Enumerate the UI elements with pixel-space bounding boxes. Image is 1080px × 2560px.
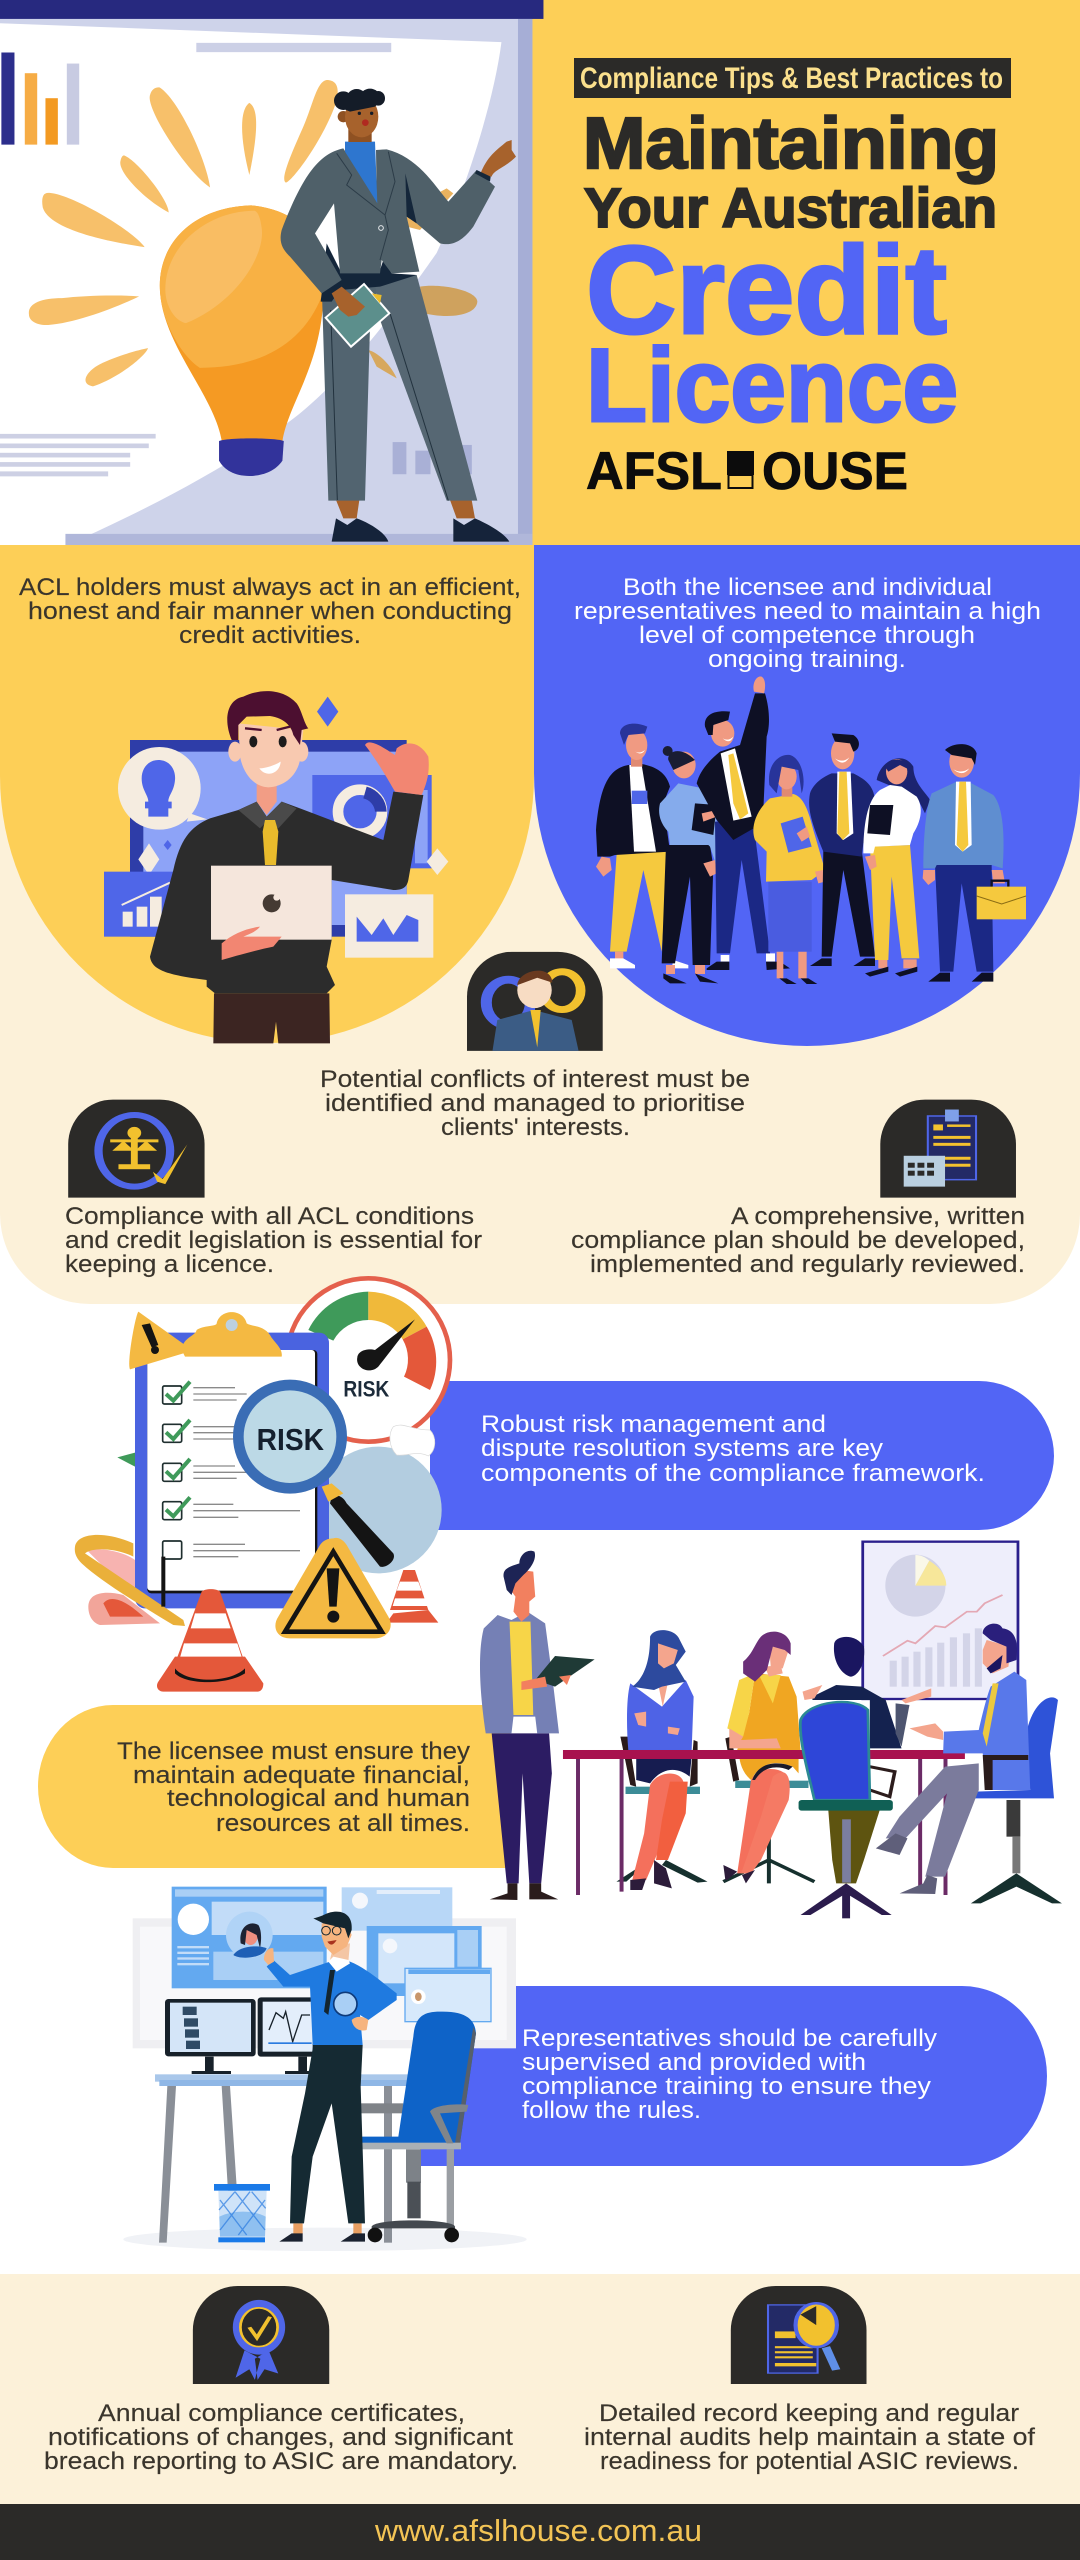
office chair <box>359 2012 476 2242</box>
seated woman in yellow <box>723 1632 814 1883</box>
panel text: efficient honest and fair: ACL holders must always act in an efficient, <box>19 574 521 601</box>
panel: risk management callout: dispute resolution systems are key <box>481 1435 884 1462</box>
text: compliance plan: A comprehensive, written <box>731 1203 1025 1230</box>
panel: resources callout: technological and human <box>167 1785 470 1812</box>
bar chart panel <box>104 872 181 937</box>
logo: AFSL House: AFSL <box>586 442 722 501</box>
icon: compliance clipboard and calendar <box>880 1100 1016 1198</box>
illustration: risk checklist, gauge and cones <box>75 1278 450 1692</box>
text: conflicts of interest: identified and managed to prioritise <box>325 1090 745 1117</box>
figure 7 <box>923 744 1005 982</box>
panel: risk management callout <box>430 1381 1054 1530</box>
area chart panel <box>345 894 433 958</box>
seated woman in blue <box>616 1630 708 1890</box>
text: ACL conditions: Compliance with all ACL conditions <box>65 1203 474 1230</box>
panel: yellow arch <box>0 545 534 1043</box>
panel: training callout: follow the rules. <box>522 2097 701 2124</box>
title: Credit <box>586 222 947 360</box>
text: ACL conditions: and credit legislation is essential for <box>65 1227 482 1254</box>
text: compliance plan: compliance plan should be developed, <box>571 1227 1025 1254</box>
panel text: efficient honest and fair: honest and fair manner when conducting <box>28 598 512 625</box>
panel text: competence through training <box>574 574 1041 673</box>
text: record keeping and audits: internal audits help maintain a state of <box>584 2424 1035 2451</box>
icon: magnifying glass: RISK <box>257 1423 324 1457</box>
icon: person with gears <box>467 952 603 1051</box>
presentation board <box>863 1542 1018 1699</box>
title: Your Australian <box>584 176 997 239</box>
small bar chart <box>393 442 472 474</box>
title: Maintaining <box>583 104 999 184</box>
panel: training callout: compliance training to ensure they <box>522 2073 932 2100</box>
text: ACL conditions <box>65 1203 482 1278</box>
illustration: businessman with laptop <box>104 691 448 1043</box>
title: Licence <box>586 328 958 444</box>
text: record keeping and audits: Detailed record keeping and regular <box>599 2400 1019 2427</box>
seated man on the right with chair <box>876 1624 1062 1903</box>
figure 6 <box>863 758 930 977</box>
figure 2 <box>659 746 719 983</box>
panel text: efficient honest and fair: credit activities. <box>179 622 361 649</box>
title <box>583 104 999 444</box>
icon: idea speech bubble <box>118 747 207 830</box>
icon: hard hat <box>75 1535 185 1626</box>
text: conflicts of interest: Potential conflicts of interest must be <box>320 1066 750 1093</box>
icon: light bulb <box>160 205 324 476</box>
figure 3 <box>697 676 790 970</box>
panel: cream background <box>0 700 1080 1304</box>
icon: small cone <box>387 1570 438 1623</box>
logo: AFSL House <box>586 442 908 501</box>
icon: large traffic cone <box>157 1589 263 1692</box>
text: record keeping and audits: readiness for potential ASIC reviews. <box>600 2448 1019 2475</box>
text: annual compliance certificates: breach reporting to ASIC are mandatory. <box>44 2448 518 2475</box>
laptop <box>211 866 332 940</box>
icon: warning triangle <box>275 1538 391 1638</box>
icon: waste bin <box>214 2184 270 2242</box>
panel: risk management callout: Robust risk management and <box>481 1411 826 1438</box>
panel text: competence through training: ongoing training. <box>708 646 906 673</box>
table <box>563 1750 965 1895</box>
text: annual compliance certificates: Annual compliance certificates, <box>98 2400 465 2427</box>
text: annual compliance certificates <box>44 2400 518 2475</box>
panel: header yellow background <box>532 0 1080 546</box>
text: compliance plan <box>571 1203 1025 1278</box>
icon: clipboard checklist <box>129 1312 329 1608</box>
logo: AFSL House: OUSE <box>762 442 908 501</box>
figure 4 <box>753 755 825 984</box>
figure 5 <box>809 733 875 966</box>
panel text: competence through training: Both the licensee and individual <box>623 574 992 601</box>
panel text: efficient honest and fair <box>19 574 521 649</box>
illustration: meeting room with team <box>480 1542 1062 1918</box>
icon: magnifying glass <box>238 1385 394 1567</box>
panel: bottom cream band <box>0 2274 1080 2504</box>
standing presenter <box>480 1551 595 1900</box>
text: ACL conditions: keeping a licence. <box>65 1251 274 1278</box>
figure 1 <box>596 724 688 968</box>
desk <box>155 2074 409 2243</box>
icon: risk gauge <box>287 1278 450 1442</box>
panel: blue arch <box>534 545 1080 1046</box>
illustration: team of seven professionals <box>596 676 1026 984</box>
icon: briefcase <box>977 881 1026 919</box>
panel text: competence through training: level of competence through <box>639 622 975 649</box>
icon: risk gauge: RISK <box>343 1377 389 1402</box>
panel: resources callout: resources at all times. <box>216 1810 470 1837</box>
seated man seen from behind with chair <box>799 1637 931 1918</box>
panel: training callout <box>420 1986 1047 2166</box>
icon: bulb rays <box>29 87 256 386</box>
bar chart: top left <box>1 52 79 145</box>
panel: training callout: Representatives should be carefully <box>522 2025 938 2052</box>
text: annual compliance certificates: notifications of changes, and significant <box>48 2424 513 2451</box>
profile screens <box>172 1887 491 2022</box>
text: compliance plan: implemented and regularly reviewed. <box>590 1251 1025 1278</box>
footer <box>0 2504 1080 2560</box>
icon: scales with badge <box>68 1100 205 1198</box>
illustration: supervisor at desk with profile screens <box>123 1887 527 2251</box>
panel text: competence through training: representatives need to maintain a high <box>574 598 1041 625</box>
text: conflicts of interest <box>320 1066 750 1141</box>
panel: header screen with light bulb <box>0 0 543 546</box>
text: conflicts of interest: clients' interests. <box>441 1114 630 1141</box>
panel: training callout: supervised and provided with <box>522 2049 866 2076</box>
panel: resources callout: The licensee must ensure they <box>117 1738 471 1765</box>
text lines decoration <box>0 434 156 476</box>
supervisor figure <box>264 1912 397 2242</box>
panel: resources callout <box>38 1705 510 1868</box>
footer: www.afslhouse.com.au <box>374 2513 702 2548</box>
panel: risk management callout: components of the compliance framework. <box>481 1460 985 1487</box>
desktop monitors <box>165 1997 314 2074</box>
panel: resources callout: maintain adequate financial, <box>133 1762 470 1789</box>
text: record keeping and audits <box>584 2400 1035 2475</box>
icon: certificate rosette <box>193 2286 329 2384</box>
icon: document and magnifier <box>731 2286 867 2384</box>
presenter figure in grey suit <box>281 80 516 542</box>
